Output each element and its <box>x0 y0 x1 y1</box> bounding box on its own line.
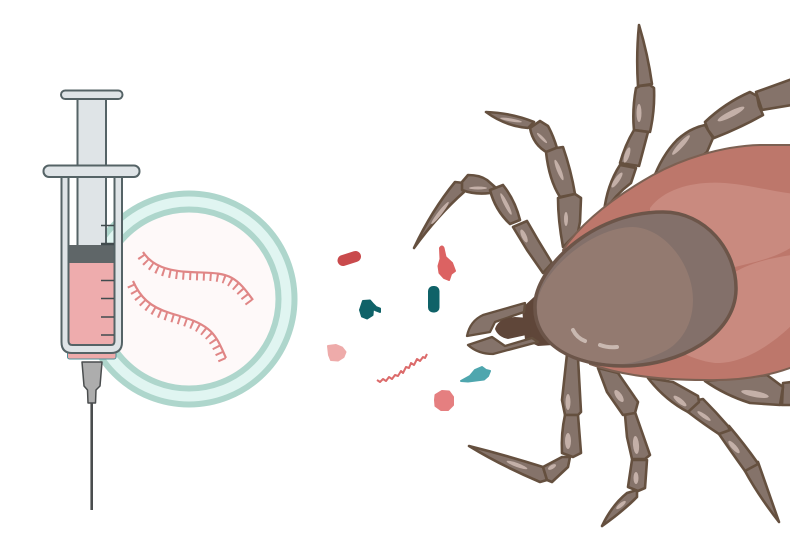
leg: lower right long <box>648 378 779 522</box>
needle hub <box>82 362 102 403</box>
leg: lower middle <box>598 368 650 526</box>
leg: lower far right <box>705 375 792 405</box>
shine marks <box>573 330 617 347</box>
pathogen: wavy filament <box>377 354 427 382</box>
plunger stopper <box>69 245 114 263</box>
mouthparts <box>467 296 553 354</box>
pathogen: red rod <box>343 256 356 260</box>
liquid <box>69 263 114 345</box>
panel: magnified RNA circle <box>84 194 294 404</box>
RNA strand upper <box>141 252 253 304</box>
plunger rod <box>78 98 106 246</box>
needle <box>90 403 93 510</box>
leg: upper far right <box>652 79 792 182</box>
barrel wall <box>62 177 122 353</box>
leg: lower left <box>469 354 581 482</box>
leg: upper centre long <box>604 25 654 212</box>
tick body: engorged abdomen <box>563 145 795 380</box>
syringe <box>44 90 140 510</box>
palp upper <box>467 303 525 336</box>
plunger cap <box>61 90 122 99</box>
leg: far left <box>414 175 552 273</box>
mouth base <box>522 296 550 346</box>
RNA strand lower <box>131 281 226 362</box>
bottom seal <box>68 350 116 359</box>
pathogen: coral blob <box>435 391 453 410</box>
leg: upper hooked <box>486 112 581 247</box>
pathogen: light teal fragment <box>461 367 490 382</box>
pathogen: salmon fragment <box>438 246 455 280</box>
pathogen: pink blob <box>328 345 346 360</box>
palp lower <box>468 337 538 354</box>
graduation marks <box>101 226 114 335</box>
pathogen: dark teal squiggle <box>360 300 380 318</box>
tick <box>414 25 795 526</box>
pathogen: dark teal rod <box>428 286 440 312</box>
finger flange <box>44 166 140 177</box>
hypostome <box>495 317 525 339</box>
tick scutum shield <box>535 212 736 366</box>
pathogens <box>328 246 490 410</box>
